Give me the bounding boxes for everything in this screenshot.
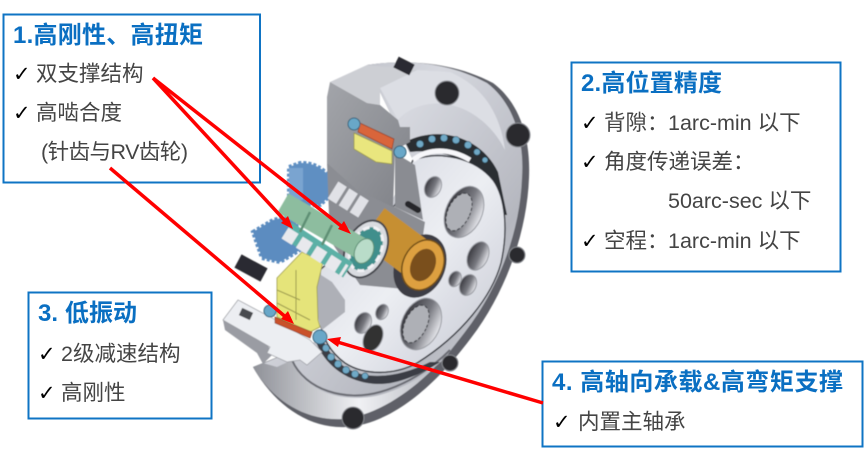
panel 2 angle error value: 50arc-sec 以下 [668,189,811,213]
orange bushing [372,225,457,306]
panel 4 heading: 4. 高轴向承载&高弯矩支撑 [552,368,843,396]
panel 3 item: 2级减速结构 [61,342,180,366]
panel 3 check: ✓ [38,381,56,405]
panel 4 check: ✓ [553,410,571,434]
panel 2 lost motion: 空程： [604,229,669,253]
panel 1 item: 高啮合度 [36,101,122,125]
teal track under rollers [287,230,348,270]
panel 1 check: ✓ [13,62,31,86]
lower blue gear [253,215,300,262]
top block upper face [330,65,417,105]
panel 2 lost motion value: 1arc-min 以下 [668,229,801,253]
panel 4 item: 内置主轴承 [578,410,686,434]
arrow: panel 1 to pin gear [110,168,294,324]
bearing teal rollers [343,222,389,276]
panel 2 check: ✓ [581,150,599,174]
panel 1 heading: 1.高刚性、高扭矩 [13,22,203,49]
panel 1: high rigidity and torque [4,14,260,182]
small pin in gray section [408,204,418,210]
lower bearing ball left [264,305,276,317]
panel 2 backlash: 背隙： [604,111,669,135]
top roller set: yellow blocks [354,133,392,164]
lower bearing ball right [313,330,327,344]
upper ring step [380,70,505,150]
upper blue gear [289,163,334,205]
arrow: panel 4 to main bearing [327,337,543,403]
reducer cutaway illustration [223,62,530,429]
panel 3 item: 高刚性 [61,381,126,405]
panel 3 check: ✓ [38,342,56,366]
black set screw left [238,261,264,275]
front gray section [395,153,423,220]
ring step arc [292,350,450,395]
lower ring face [253,332,465,419]
outer ring back edge [253,62,529,427]
panel 3 heading: 3. 低振动 [38,300,137,327]
eccentric bearing [335,213,397,285]
top bearing ball large left [348,118,360,130]
lower left block [223,300,322,365]
yellow cycloid gear [277,252,323,332]
panel 2 check: ✓ [581,111,599,135]
lower left block side [223,320,272,364]
lower bolt pocket [239,308,253,320]
panel 1 item: 双支撑结构 [36,62,144,86]
panel 3: low vibration [28,292,212,418]
top roller set: orange bar [358,123,394,149]
outer ring front face [262,62,522,419]
inner output disc [320,156,505,372]
green crank shaft [283,203,378,267]
cap bolts [342,81,530,429]
disc highlight arc [413,151,470,160]
arrow: panel 1 to crank bearing lower [153,78,293,229]
white needle rollers front [285,233,345,271]
cavity around crank [327,163,425,290]
gray cut wall by yellow gear [315,273,345,330]
panel 1 check: ✓ [13,101,31,125]
panel 2 heading: 2.高位置精度 [581,69,722,97]
panel 4: axial load and moment support [542,362,862,446]
holes in disc [351,174,493,357]
lower bearing balls [322,344,368,379]
panel 2 check: ✓ [581,229,599,253]
panel 2: high position accuracy [572,62,840,272]
top bearing balls [416,134,488,163]
panel 1 sub item: (针齿与RV齿轮) [41,140,188,164]
top bearing race [405,134,507,215]
lower bearing race [316,338,440,384]
lower orange bar [275,317,312,338]
panel 2 backlash value: 1arc-min 以下 [668,111,801,135]
black set screw top [396,62,412,70]
top bearing ball large right [394,146,406,158]
top block cut face [327,82,410,207]
arrow: panel 1 to crank bearing upper [153,78,351,234]
panel 2 angle error: 角度传递误差： [604,150,755,174]
white needle rollers rear [333,190,365,210]
